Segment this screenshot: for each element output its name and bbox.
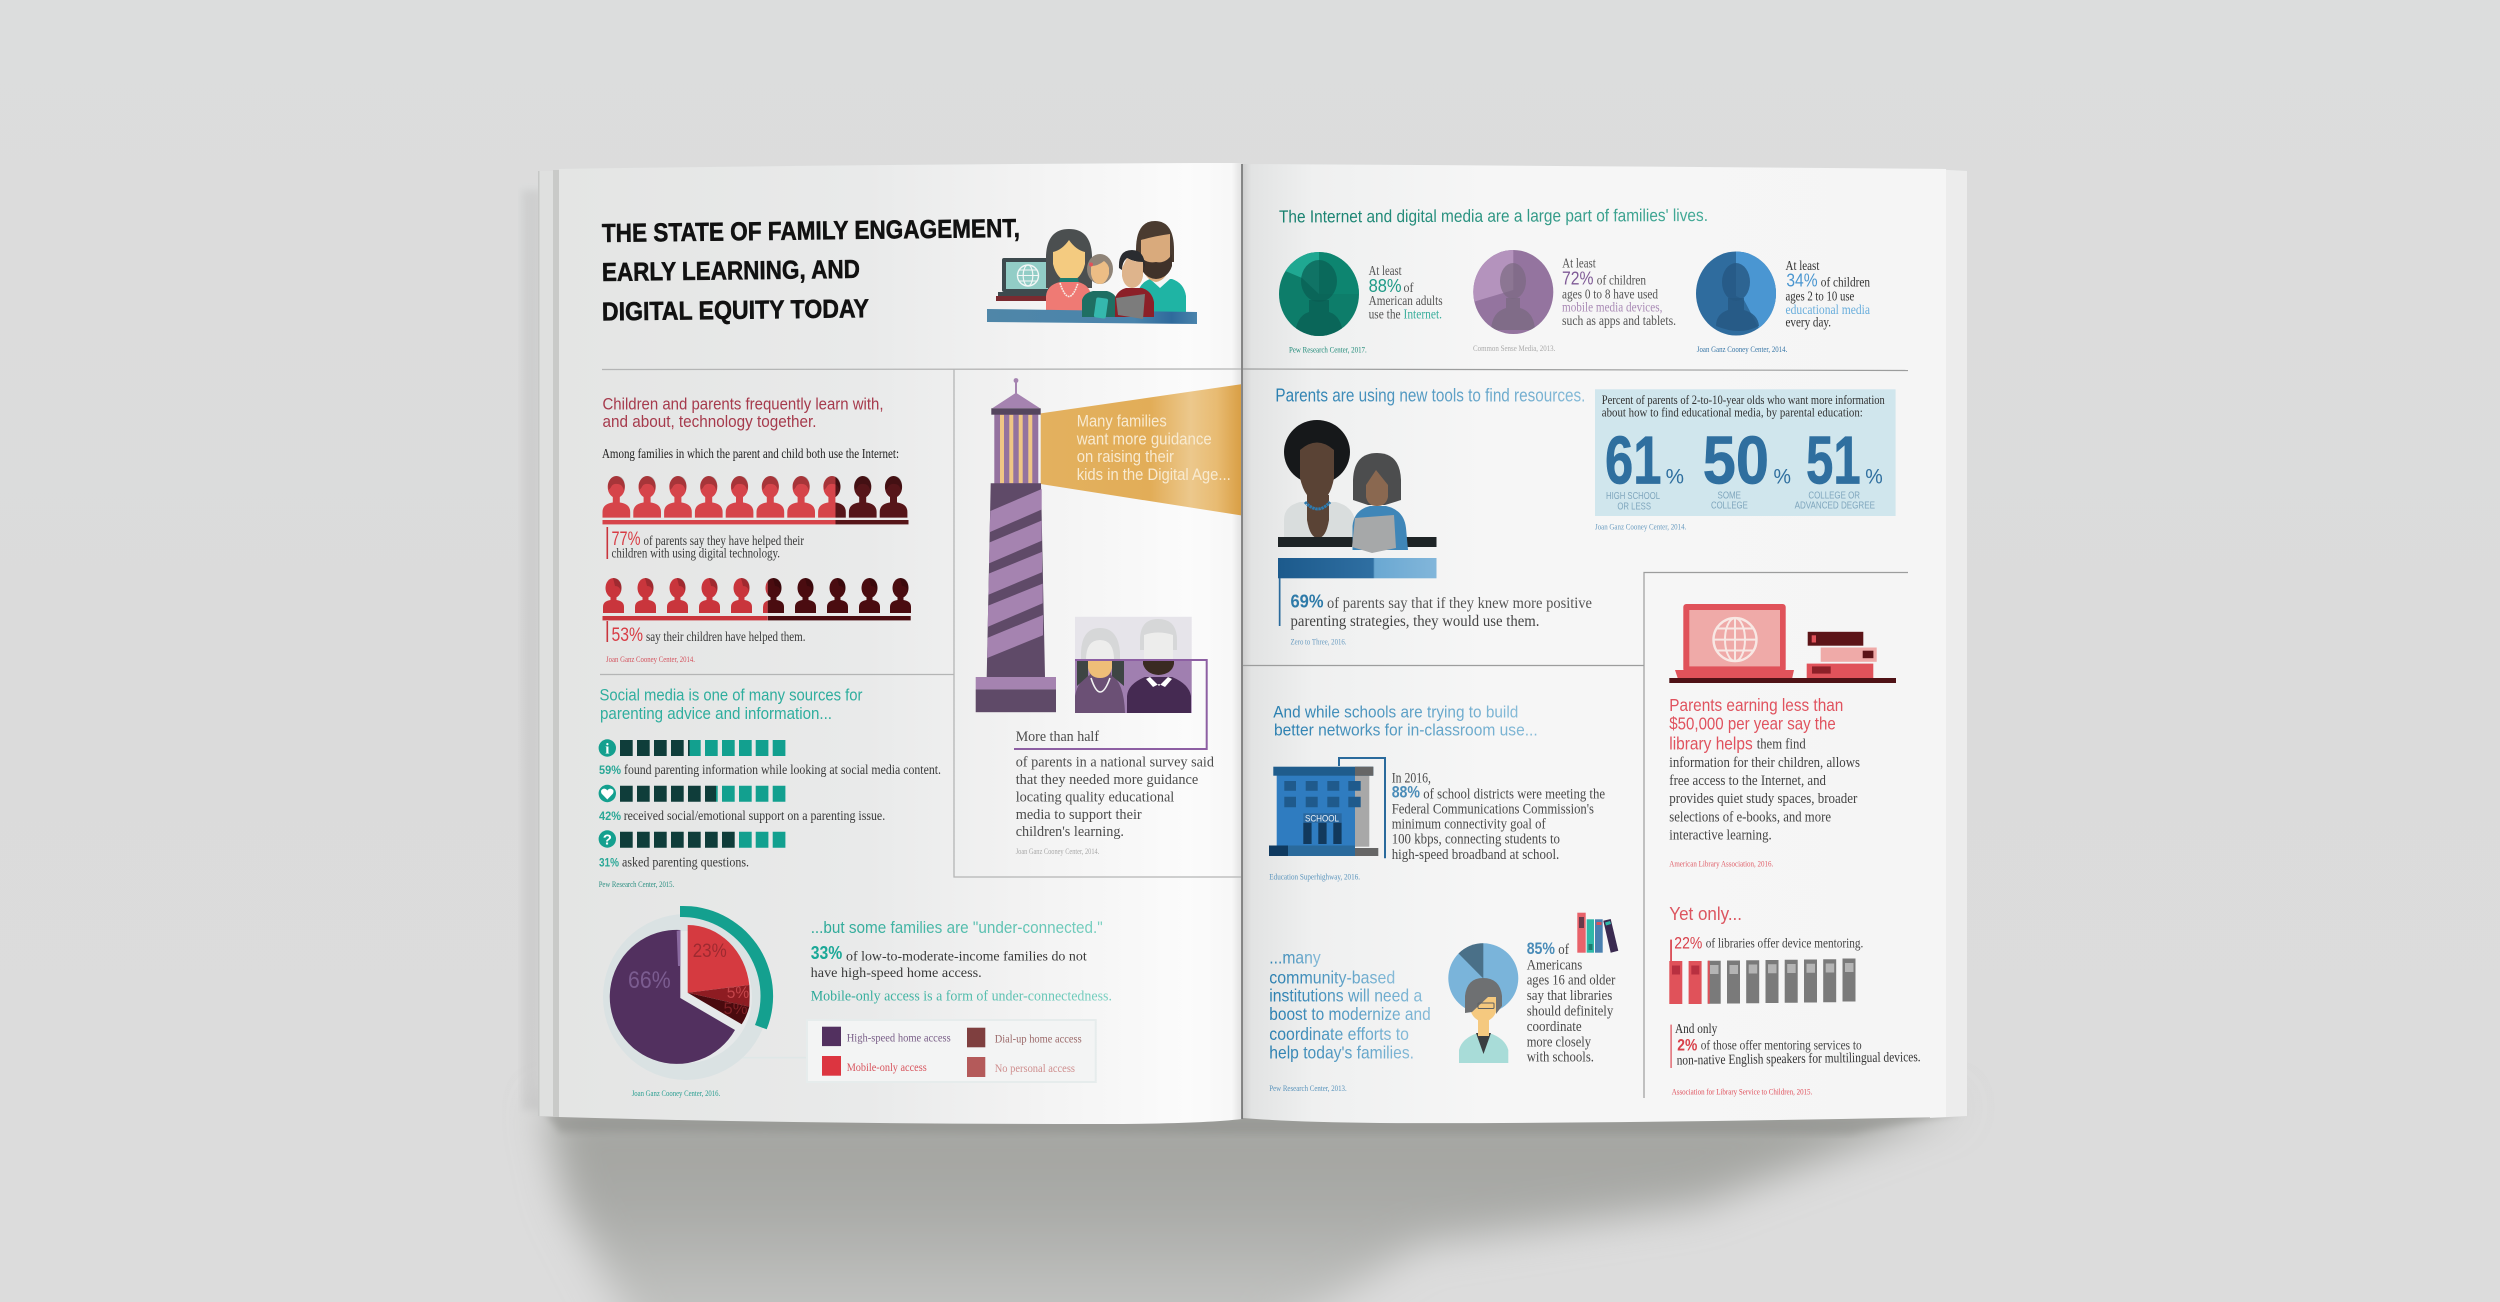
text: 88 percent of school districts bbox=[1392, 770, 1605, 863]
chart: pie of home access bbox=[603, 906, 773, 1080]
legend bbox=[807, 1020, 1096, 1082]
stat: 2 percent: And only bbox=[1675, 1022, 1717, 1037]
stat: 51 percent: COLLEGE OR bbox=[1808, 490, 1860, 502]
heading: social media: parenting advice and information... bbox=[600, 704, 832, 723]
stat: 22 percent: of libraries offer device mentoring. bbox=[1706, 935, 1863, 950]
text: many families beam bbox=[1076, 413, 1231, 484]
text: 88 percent of school districts: In 2016, bbox=[1392, 770, 1431, 786]
legend item: high-speed bbox=[822, 1027, 951, 1046]
source: Pew 2017: Pew Research Center, 2017. bbox=[1289, 344, 1367, 354]
icon: family with laptop bbox=[987, 221, 1197, 324]
chart: 42 percent squares bbox=[599, 785, 785, 802]
text: 42 percent: 42% bbox=[599, 809, 621, 823]
icon: purple person circle bbox=[1473, 250, 1554, 335]
text: 88 percent bbox=[1369, 263, 1443, 321]
chart: pie of home access: 5% bbox=[727, 983, 749, 1002]
text: 72 percent: mobile media devices, bbox=[1562, 300, 1662, 315]
text: 72 percent: 72% bbox=[1562, 268, 1594, 288]
legend item: no personal: No personal access bbox=[995, 1063, 1075, 1075]
text: 42 percent: received social/emotional support on a parenting issue. bbox=[624, 809, 885, 824]
illustration: school building bbox=[1269, 758, 1385, 858]
dividers right page bbox=[1243, 369, 1908, 1098]
stat: 33 percent: 33% bbox=[811, 943, 842, 963]
stat: 77 percent: of parents say they have helped their bbox=[644, 534, 804, 549]
icon: books bbox=[1577, 913, 1618, 953]
text: 85 percent bbox=[1527, 939, 1615, 1065]
heading: children and parents: Children and parents frequently learn with, bbox=[602, 394, 884, 414]
text: 34 percent bbox=[1786, 258, 1870, 330]
pictogram: 53 percent of parents bbox=[602, 578, 911, 620]
panel: parental education percentages: about how to find educational media, by parental education: bbox=[1602, 405, 1863, 420]
stat: 69 percent: of parents say that if they knew more positive bbox=[1327, 595, 1592, 612]
illustration: school building: SCHOOL bbox=[1305, 814, 1339, 824]
heading: schools: better networks for in-classroom use... bbox=[1274, 721, 1538, 740]
illustration: lighthouse bbox=[976, 378, 1241, 712]
title: EARLY LEARNING, AND bbox=[602, 254, 860, 287]
illustration: library laptop and books bbox=[1669, 604, 1896, 683]
source: Joan Ganz Cooney 2014: Joan Ganz Cooney Center, 2014. bbox=[1697, 344, 1787, 354]
panel: right page bbox=[1243, 164, 1946, 1123]
stat: 69 percent: parenting strategies, they would use them. bbox=[1290, 613, 1540, 630]
heading: children and parents: and about, technology together. bbox=[602, 412, 816, 431]
stat: 33 percent: have high-speed home access. bbox=[811, 966, 982, 981]
text: many families beam: Many families bbox=[1077, 413, 1167, 431]
text: more than half: that they needed more guidance bbox=[1016, 772, 1199, 788]
text: 88 percent of school districts: of school districts were meeting the bbox=[1423, 786, 1605, 802]
source: Pew 2015: Pew Research Center, 2015. bbox=[599, 879, 674, 889]
stat: 50 percent: % bbox=[1774, 465, 1791, 488]
stat: 69 percent: 69% bbox=[1290, 592, 1324, 612]
text: 72 percent: such as apps and tablets. bbox=[1562, 313, 1676, 328]
heading: new tools: Parents are using new tools to find resources. bbox=[1275, 386, 1585, 406]
stat: 51 percent: % bbox=[1865, 465, 1883, 488]
icon: question bbox=[599, 830, 616, 848]
stat: 2 percent: 2% bbox=[1677, 1035, 1697, 1054]
text: 31 percent: asked parenting questions. bbox=[622, 856, 749, 871]
chart: pie of home access: 5% bbox=[724, 999, 748, 1018]
text: 88 percent: Internet. bbox=[1404, 306, 1442, 321]
heading: many community-based institutions: boost to modernize and bbox=[1269, 1004, 1431, 1024]
text: 85 percent: should definitely bbox=[1527, 1003, 1614, 1019]
text: 88 percent: use the bbox=[1369, 306, 1401, 321]
text: parents earning less: library helps bbox=[1669, 733, 1753, 753]
text: 34 percent: ages 2 to 10 use bbox=[1786, 289, 1854, 304]
heading: children and parents bbox=[602, 394, 884, 431]
stat: 61 percent: HIGH SCHOOL bbox=[1606, 490, 1660, 502]
stat: 77 percent: 77% bbox=[612, 529, 641, 550]
stat: 61 percent: % bbox=[1666, 465, 1684, 488]
text: more than half: children's learning. bbox=[1016, 824, 1124, 840]
legend item: no personal bbox=[967, 1057, 1075, 1077]
icon: blue person circle bbox=[1696, 251, 1777, 336]
stat: 77 percent: children with using digital technology. bbox=[612, 546, 780, 562]
stat: 53 percent: 53% bbox=[612, 625, 643, 646]
text: 34 percent: At least bbox=[1786, 258, 1820, 273]
dividers left page bbox=[600, 369, 1241, 877]
stat: 2 percent: of those offer mentoring services to bbox=[1701, 1039, 1862, 1054]
book cover edges bbox=[538, 169, 1967, 1118]
text: parents earning less: interactive learning. bbox=[1669, 828, 1772, 844]
source: Education Superhighway: Education Superhighway, 2016. bbox=[1269, 871, 1360, 881]
legend item: high-speed: High-speed home access bbox=[847, 1033, 951, 1045]
text: many families beam: want more guidance bbox=[1076, 430, 1212, 448]
icon: question: ? bbox=[603, 832, 612, 848]
text: parents earning less: selections of e-books, and more bbox=[1669, 809, 1831, 825]
stat: 61 percent: 61 bbox=[1605, 422, 1662, 498]
stat: 53 percent bbox=[606, 621, 806, 646]
heading: yet only: Yet only... bbox=[1669, 904, 1742, 924]
text: 59 percent: found parenting information while looking at social media content. bbox=[624, 763, 941, 778]
panel: parental education percentages: Percent of parents of 2-to-10-year olds who want more information bbox=[1602, 392, 1885, 407]
heading: schools: And while schools are trying to build bbox=[1273, 702, 1518, 721]
stat: 51 percent: ADVANCED DEGREE bbox=[1795, 500, 1875, 512]
text: 34 percent: of children bbox=[1821, 275, 1870, 290]
source: Joan Ganz Cooney 2016: Joan Ganz Cooney Center, 2016. bbox=[632, 1088, 720, 1098]
text: parents earning less: free access to the Internet, and bbox=[1669, 773, 1827, 789]
text: more than half: of parents in a national survey said bbox=[1016, 754, 1214, 770]
text: 85 percent: Americans bbox=[1527, 957, 1582, 973]
text: 88 percent of school districts: Federal Communications Commission's bbox=[1392, 801, 1594, 817]
text: 85 percent: say that libraries bbox=[1527, 988, 1612, 1004]
heading: many community-based institutions: help today's families. bbox=[1269, 1042, 1414, 1062]
heading: many community-based institutions: community-based bbox=[1269, 967, 1395, 987]
text: 88 percent: At least bbox=[1369, 263, 1402, 278]
stat: 2 percent: non-native English speakers for multilingual devices. bbox=[1677, 1050, 1921, 1069]
text: 88 percent of school districts: 88% bbox=[1392, 783, 1420, 802]
stat: 69 percent bbox=[1279, 578, 1592, 630]
legend connector bbox=[742, 1057, 807, 1059]
chart: tablets 22 percent bbox=[1669, 958, 1856, 1004]
panel: parental education percentages bbox=[1595, 389, 1896, 516]
text: 59 percent: 59% bbox=[599, 763, 621, 777]
text: 34 percent: educational media bbox=[1786, 302, 1870, 317]
text: 31 percent: 31% bbox=[599, 856, 619, 870]
text: 88 percent of school districts: 100 kbps, connecting students to bbox=[1392, 832, 1560, 848]
text: 85 percent: coordinate bbox=[1527, 1019, 1582, 1035]
text: parents earning less: information for their children, allows bbox=[1669, 755, 1860, 771]
title: THE STATE OF FAMILY ENGAGEMENT, bbox=[602, 213, 1020, 248]
text: parents earning less: provides quiet study spaces, broader bbox=[1669, 791, 1857, 807]
text: among families: Among families in which the parent and child both use the Internet: bbox=[602, 446, 899, 461]
text: 88 percent of school districts: minimum connectivity goal of bbox=[1392, 816, 1546, 832]
text: parents earning less: $50,000 per year say the bbox=[1669, 714, 1836, 734]
text: 85 percent: 85% bbox=[1527, 939, 1555, 958]
stat: 2 percent bbox=[1670, 1022, 1921, 1069]
stat: 22 percent bbox=[1670, 934, 1863, 962]
source: Joan Ganz Cooney 2014: Joan Ganz Cooney Center, 2014. bbox=[1016, 846, 1099, 856]
heading: social media bbox=[600, 686, 863, 723]
source: Association for Library Service: Association for Library Service to Children, 2015. bbox=[1672, 1086, 1812, 1096]
legend item: dial-up bbox=[967, 1028, 1082, 1047]
source: Zero to Three: Zero to Three, 2016. bbox=[1290, 636, 1346, 646]
text: 88 percent of school districts: high-speed broadband at school. bbox=[1392, 847, 1559, 863]
heading: many community-based institutions: institutions will need a bbox=[1269, 986, 1423, 1006]
stat: 77 percent bbox=[606, 527, 804, 562]
text: 88 percent: 88% bbox=[1369, 276, 1402, 296]
source: Pew 2013: Pew Research Center, 2013. bbox=[1269, 1083, 1347, 1093]
icon: info bbox=[599, 739, 616, 758]
stat: 33 percent bbox=[811, 943, 1087, 981]
title: DIGITAL EQUITY TODAY bbox=[602, 293, 869, 326]
heading: many community-based institutions: ...many bbox=[1269, 947, 1321, 967]
book spine bbox=[1241, 164, 1243, 1119]
stat: 61 percent: OR LESS bbox=[1617, 500, 1651, 512]
illustration: mother and daughter bbox=[1278, 420, 1436, 578]
source: Common Sense Media: Common Sense Media, 2013. bbox=[1473, 343, 1555, 353]
text: more than half: locating quality educational bbox=[1016, 790, 1174, 806]
text: many families beam: kids in the Digital Age... bbox=[1077, 466, 1231, 484]
text: 72 percent: ages 0 to 8 have used bbox=[1562, 286, 1658, 301]
text: 85 percent: more closely bbox=[1527, 1035, 1591, 1051]
text: parents earning less: them find bbox=[1757, 737, 1806, 753]
heading: social media: Social media is one of many sources for bbox=[600, 686, 863, 704]
heading: many community-based institutions bbox=[1269, 947, 1431, 1062]
title bbox=[602, 213, 1020, 326]
text: more than half: media to support their bbox=[1016, 807, 1142, 823]
chart: pie of home access: 23% bbox=[693, 941, 727, 962]
book shadow bbox=[522, 190, 1965, 1302]
text: 34 percent: every day. bbox=[1786, 315, 1831, 330]
text: parents earning less bbox=[1669, 695, 1860, 844]
icon: heart bbox=[599, 785, 616, 802]
stat: 50 percent: COLLEGE bbox=[1711, 500, 1748, 512]
source: American Library Association: American Library Association, 2016. bbox=[1669, 858, 1773, 868]
stat: 22 percent: 22% bbox=[1674, 934, 1702, 953]
stat: 50 percent: 50 bbox=[1703, 422, 1769, 498]
chart: pie of home access: 66% bbox=[628, 967, 671, 994]
stat: 33 percent: of low-to-moderate-income families do not bbox=[846, 950, 1087, 964]
text: mobile-only: Mobile-only access is a form of under-connectedness. bbox=[811, 989, 1112, 1005]
text: 88 percent: of bbox=[1404, 280, 1414, 295]
pictogram: 77 percent of parents bbox=[602, 476, 908, 524]
chart: 59 percent squares bbox=[599, 739, 785, 758]
text: more than half: More than half bbox=[1016, 729, 1099, 745]
text: 85 percent: of bbox=[1558, 942, 1569, 958]
legend item: mobile-only: Mobile-only access bbox=[847, 1062, 927, 1074]
heading: many community-based institutions: coordinate efforts to bbox=[1269, 1024, 1409, 1044]
text: more than half bbox=[1016, 729, 1214, 840]
stat: 53 percent: say their children have helped them. bbox=[646, 630, 806, 645]
chart: 31 percent squares bbox=[599, 830, 785, 848]
source: Joan Ganz Cooney 2014: Joan Ganz Cooney Center, 2014. bbox=[606, 654, 695, 664]
text: many families beam: on raising their bbox=[1077, 448, 1174, 466]
stat: 51 percent: 51 bbox=[1806, 422, 1861, 498]
text: 85 percent: with schools. bbox=[1527, 1049, 1594, 1065]
text: 88 percent: American adults bbox=[1369, 293, 1443, 308]
heading: internet and digital media: The Internet and digital media are a large part of families' lives. bbox=[1279, 205, 1708, 226]
legend item: mobile-only bbox=[822, 1056, 927, 1076]
callout frame line bbox=[1014, 660, 1207, 749]
text: 34 percent: 34% bbox=[1786, 271, 1818, 291]
text: parents earning less: Parents earning less than bbox=[1669, 695, 1843, 715]
legend item: dial-up: Dial-up home access bbox=[995, 1034, 1082, 1046]
icon: teal person circle bbox=[1279, 250, 1360, 337]
text: 85 percent: ages 16 and older bbox=[1527, 972, 1615, 988]
chart: pie with librarian bbox=[1448, 943, 1518, 1063]
illustration: parents bbox=[1075, 617, 1192, 713]
heading: under-connected: ...but some families are "under-connected." bbox=[811, 918, 1103, 937]
text: 72 percent: of children bbox=[1597, 272, 1646, 287]
stat: 50 percent: SOME bbox=[1718, 490, 1741, 502]
text: 72 percent: At least bbox=[1562, 256, 1596, 271]
panel: left page bbox=[559, 163, 1242, 1124]
text: 72 percent bbox=[1562, 256, 1676, 328]
heading: schools bbox=[1273, 702, 1538, 740]
icon: info: i bbox=[605, 742, 609, 758]
source: Joan Ganz Cooney 2014: Joan Ganz Cooney Center, 2014. bbox=[1595, 521, 1686, 531]
